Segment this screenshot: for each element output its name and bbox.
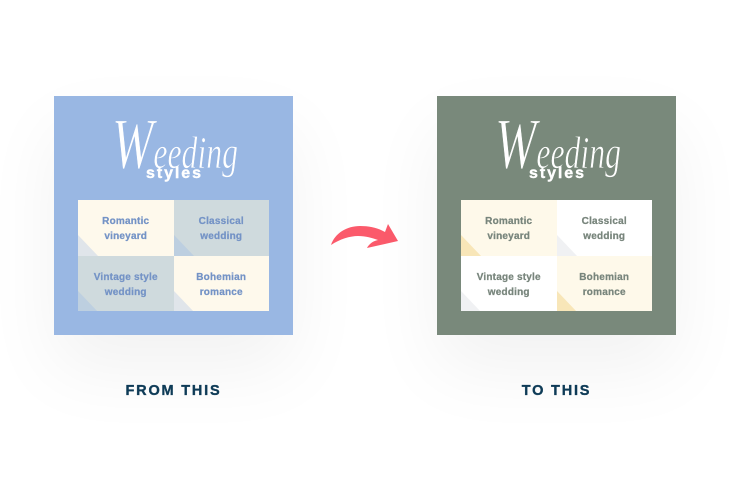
cell: Vintage style wedding [461,256,556,311]
cell: Bohemian romance [556,256,652,311]
cell: Romantic vineyard: Romantic [102,216,149,227]
panel: to this (green design) [437,96,676,335]
cell: Classical wedding: Classical [199,216,244,227]
cell: Romantic vineyard [78,200,174,256]
cell: Romantic vineyard: Romantic [485,216,532,227]
cell: Bohemian romance: romance [200,286,243,298]
cell: Bohemian romance: romance [583,286,626,298]
cell: Classical wedding: Classical [582,216,627,227]
cell: Romantic vineyard [461,200,556,256]
panel: from this (blue design) [54,96,293,335]
cell: Classical wedding [174,200,269,256]
title: Weeding styles: styles [529,165,584,182]
title: Weeding styles: styles [146,165,201,182]
cell: Vintage style wedding: wedding [488,286,530,298]
cell: Vintage style wedding: Vintage style [94,272,158,282]
cell: Vintage style wedding: wedding [105,286,147,298]
cell: Bohemian romance: Bohemian [579,272,629,282]
table: four wedding styles [461,200,652,311]
cell: Bohemian romance [174,256,269,311]
caption: from this: FROM THIS [126,383,221,399]
cell: Vintage style wedding [78,256,174,311]
cell: Vintage style wedding: Vintage style [477,272,541,282]
cell: Classical wedding: wedding [200,231,242,242]
cell: Bohemian romance: Bohemian [196,272,246,282]
arrow: pointing from left design to right design [331,224,398,248]
cell: Classical wedding: wedding [583,231,625,242]
title: Weeding styles: Weeding [495,104,621,184]
cell: Romantic vineyard: vineyard [487,231,530,242]
caption: to this: TO THIS [522,383,591,399]
title: Weeding styles: Weeding [112,104,238,184]
cell: Classical wedding [556,200,652,256]
table: four wedding styles [78,200,269,311]
cell: Romantic vineyard: vineyard [104,231,147,242]
